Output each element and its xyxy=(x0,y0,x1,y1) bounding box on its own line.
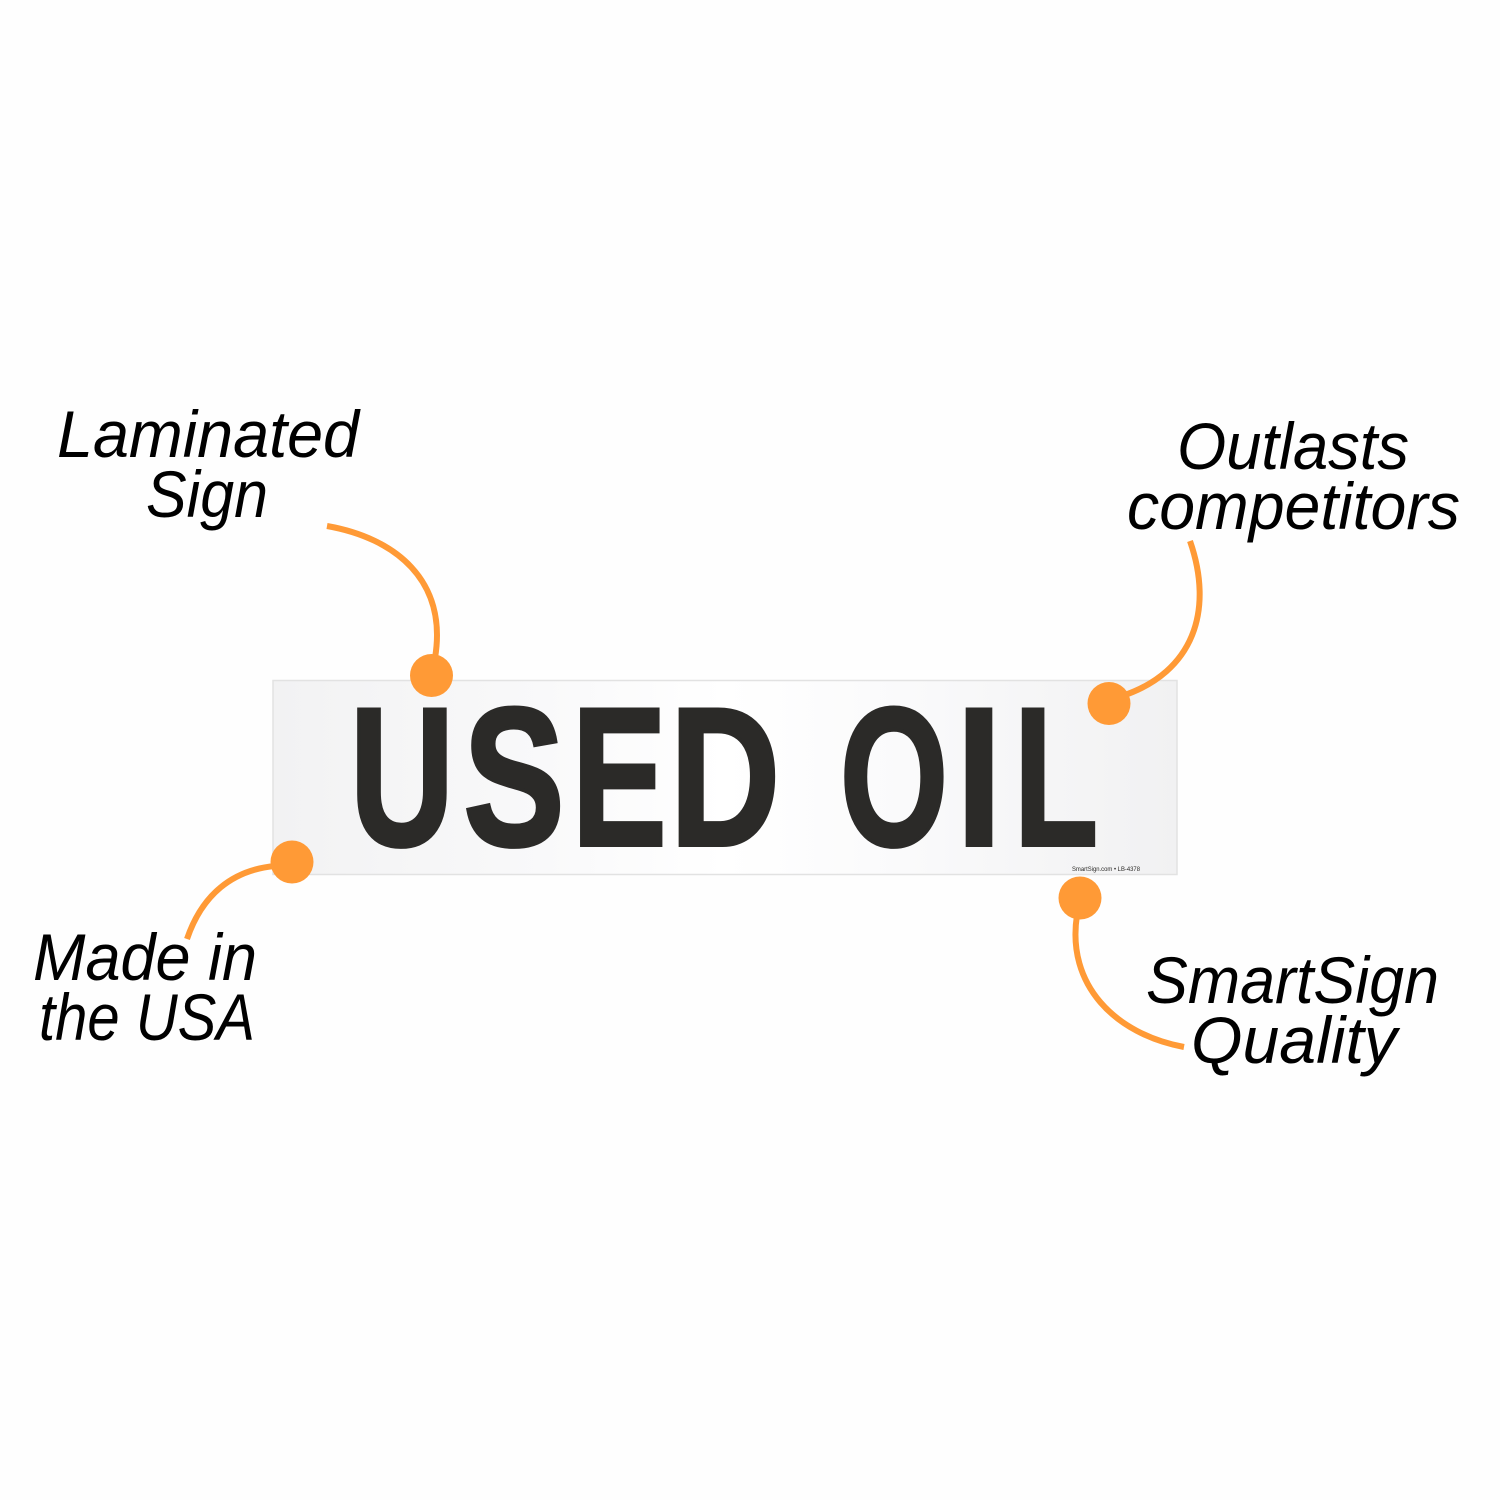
callout: Outlasts competitors xyxy=(1088,409,1460,725)
callout: SmartSign Quality xyxy=(1058,876,1439,1077)
callout: Laminated Sign xyxy=(57,397,453,697)
callout text: Laminated xyxy=(57,397,361,471)
sign panel xyxy=(273,667,1177,887)
sign heading: USED OIL: I xyxy=(956,667,1002,887)
callout text: Quality xyxy=(1191,1003,1401,1077)
callout dot xyxy=(1058,876,1102,920)
callout: Made in the USA xyxy=(33,840,314,1054)
callout text: Outlasts xyxy=(1177,409,1409,483)
sign heading: USED OIL: D xyxy=(670,667,780,887)
sign heading: USED OIL: U xyxy=(350,667,454,887)
callout text: the USA xyxy=(39,980,255,1054)
callout dot xyxy=(1088,682,1130,725)
callout text: competitors xyxy=(1127,469,1460,543)
sign heading: USED OIL: E xyxy=(572,667,666,887)
callout text: SmartSign xyxy=(1146,943,1439,1017)
sign background xyxy=(273,680,1177,874)
callout dot xyxy=(270,840,314,884)
sign heading: USED OIL: O xyxy=(840,667,948,887)
callout arrow xyxy=(187,866,275,939)
sign heading: USED OIL: L xyxy=(1014,667,1098,887)
callout dot xyxy=(410,654,453,697)
sign small print: SmartSign.com • LB-4378 xyxy=(1072,866,1140,873)
callout text: Sign xyxy=(146,457,268,531)
sign heading: USED OIL xyxy=(350,667,1098,887)
sign heading: USED OIL: S xyxy=(464,667,564,887)
callout text: Made in xyxy=(33,920,257,994)
callout arrow xyxy=(1122,541,1200,696)
callout arrow xyxy=(1075,915,1184,1047)
callout arrow xyxy=(327,526,437,658)
